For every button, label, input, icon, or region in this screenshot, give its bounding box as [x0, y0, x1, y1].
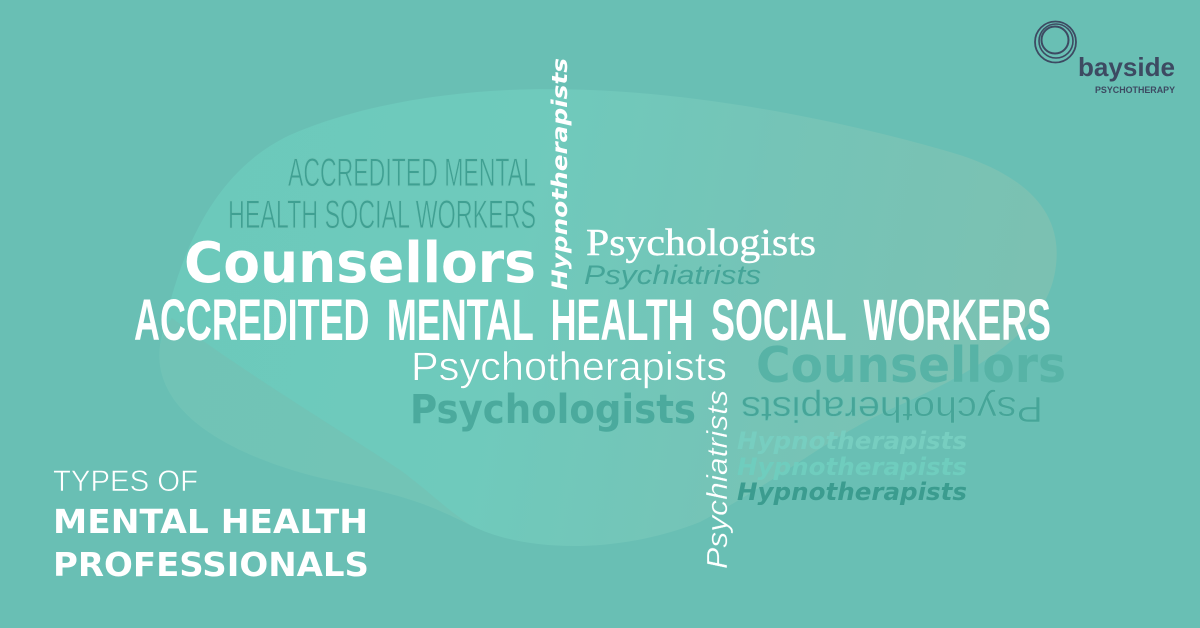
background blob — [159, 89, 1057, 546]
logo: bayside psychotherapy — [1035, 22, 1176, 96]
title — [53, 465, 369, 584]
title line: mental health: MENTAL HEALTH — [53, 502, 368, 541]
word: hypnotherapists (dark): Hypnotherapists — [737, 478, 967, 506]
word: hypnotherapists (faded): Hypnotherapists — [737, 427, 967, 455]
word: counsellors (white bold): Counsellors — [184, 231, 536, 296]
icon: swirl rings — [1035, 22, 1076, 62]
word: hypnotherapists (mid): Hypnotherapists — [737, 453, 967, 481]
word: psychotherapists (white light): Psychotherapists — [411, 345, 727, 389]
logo wordmark: bayside — [1078, 52, 1175, 82]
word: psychiatrists (vertical white): Psychiatrists — [702, 390, 734, 569]
word: psychiatrists (teal italic): Psychiatrists — [584, 260, 761, 290]
word: accredited mental (thin teal): ACCREDITED MENTAL — [288, 151, 536, 195]
logo subline: PSYCHOTHERAPY — [1095, 85, 1176, 96]
word: psychotherapists (upside down): Psychotherapists — [741, 389, 1043, 430]
title line: professionals: PROFESSIONALS — [53, 545, 369, 584]
word cloud — [134, 58, 1066, 569]
word: counsellors (teal bold): Counsellors — [756, 337, 1066, 394]
word: psychologists (teal bold): Psychologists — [410, 387, 696, 433]
word: health social workers (thin teal): HEALTH SOCIAL WORKERS — [228, 193, 536, 237]
word: psychologists (white serif): Psychologists — [586, 222, 816, 264]
word: hypnotherapists (vertical white): Hypnotherapists — [548, 58, 572, 290]
title line: types of: TYPES OF — [53, 465, 198, 498]
